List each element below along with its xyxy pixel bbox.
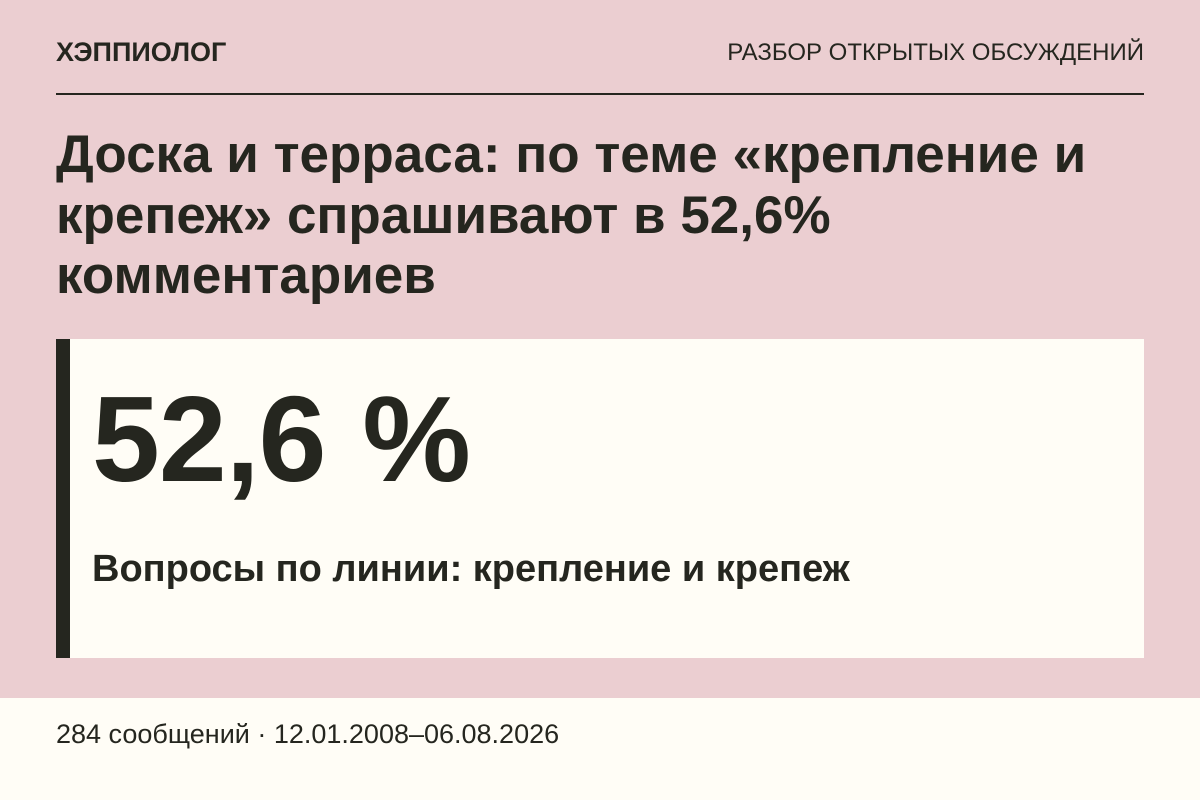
header tagline: РАЗБОР ОТКРЫТЫХ ОБСУЖДЕНИЙ xyxy=(727,39,1144,66)
source note: 284 сообщений · 12.01.2008–06.08.2026 xyxy=(56,719,559,749)
panel: key statistic xyxy=(56,339,1144,658)
statistic label: Вопросы по линии: крепление и крепеж xyxy=(92,548,850,590)
title: крепеж» спрашивают в 52,6% xyxy=(56,186,831,244)
title xyxy=(56,125,1086,305)
title: Доска и терраса: по теме «крепление и xyxy=(56,125,1086,184)
footer band xyxy=(0,698,1200,800)
brand name: ХЭППИОЛОГ xyxy=(56,37,226,67)
header rule xyxy=(56,93,1144,95)
big number: 52,6 % xyxy=(92,371,470,507)
title: комментариев xyxy=(56,246,436,305)
